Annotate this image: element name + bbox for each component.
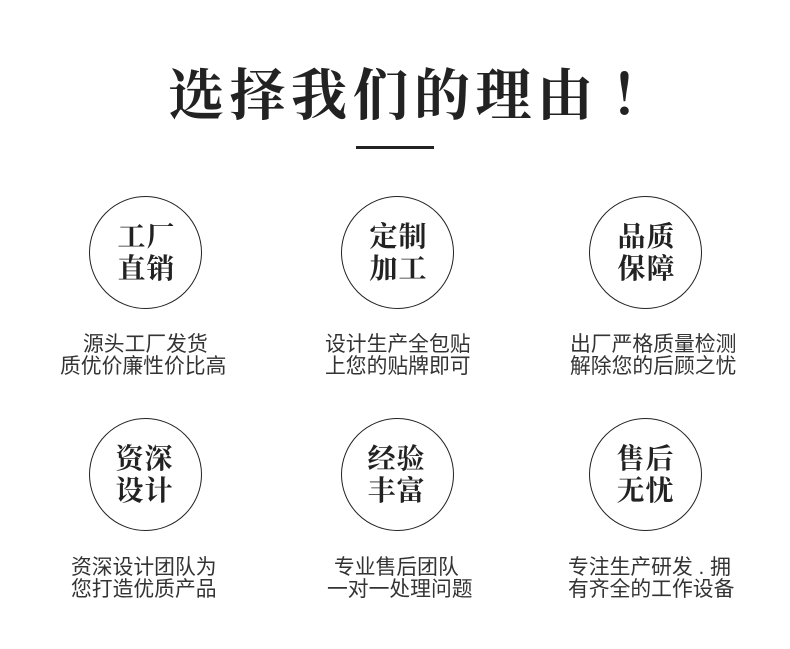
circle: 经验丰富: 丰富 — [367, 469, 426, 509]
circle: 工厂直销: 工厂 — [117, 215, 176, 255]
text: 品质保障 description: 解除您的后顾之忧 — [570, 355, 736, 378]
text: 工厂直销 description: 源头工厂发货 — [83, 333, 208, 356]
circle: 经验丰富: 经验 — [367, 437, 426, 477]
circle: 资深设计: 设计 — [115, 469, 174, 509]
title: 选择我们的理由！ — [168, 52, 672, 132]
circle: 工厂直销 — [89, 196, 202, 309]
circle: 售后无忧: 无忧 — [616, 469, 674, 509]
circle: 资深设计 — [89, 418, 202, 531]
circle: 品质保障: 品质 — [617, 215, 676, 255]
text: 售后无忧 description — [568, 556, 734, 601]
text: 工厂直销 description: 质优价廉性价比高 — [60, 355, 226, 378]
circle: 售后无忧 — [589, 418, 702, 531]
circle: 定制加工: 加工 — [369, 247, 428, 287]
text: 品质保障 description — [570, 333, 736, 378]
text: 售后无忧 description: 有齐全的工作设备 — [568, 578, 734, 601]
circle: 资深设计: 资深 — [115, 437, 174, 477]
text: 资深设计 description: 资深设计团队为 — [71, 556, 217, 579]
text: 经验丰富 description: 一对一处理问题 — [327, 578, 473, 601]
text: 资深设计 description: 您打造优质产品 — [71, 578, 217, 601]
circle: 定制加工 — [341, 196, 454, 309]
text: 定制加工 description: 上您的贴牌即可 — [325, 355, 471, 378]
circle: 品质保障 — [589, 196, 702, 309]
text: 售后无忧 description: 专注生产研发 . 拥 — [568, 556, 731, 579]
circle: 品质保障: 保障 — [617, 247, 676, 287]
text: 定制加工 description: 设计生产全包贴 — [325, 333, 471, 356]
text: 工厂直销 description — [60, 333, 226, 378]
text: 经验丰富 description — [327, 556, 473, 601]
circle: 售后无忧: 售后 — [616, 437, 674, 477]
text: 品质保障 description: 出厂严格质量检测 — [570, 333, 736, 356]
text: 定制加工 description — [325, 332, 471, 378]
circle: 工厂直销: 直销 — [117, 247, 176, 287]
text: 经验丰富 description: 专业售后团队 — [334, 556, 459, 579]
text: 资深设计 description — [71, 556, 217, 601]
title underline — [356, 146, 434, 149]
circle: 定制加工: 定制 — [369, 215, 428, 255]
circle: 经验丰富 — [341, 418, 454, 531]
